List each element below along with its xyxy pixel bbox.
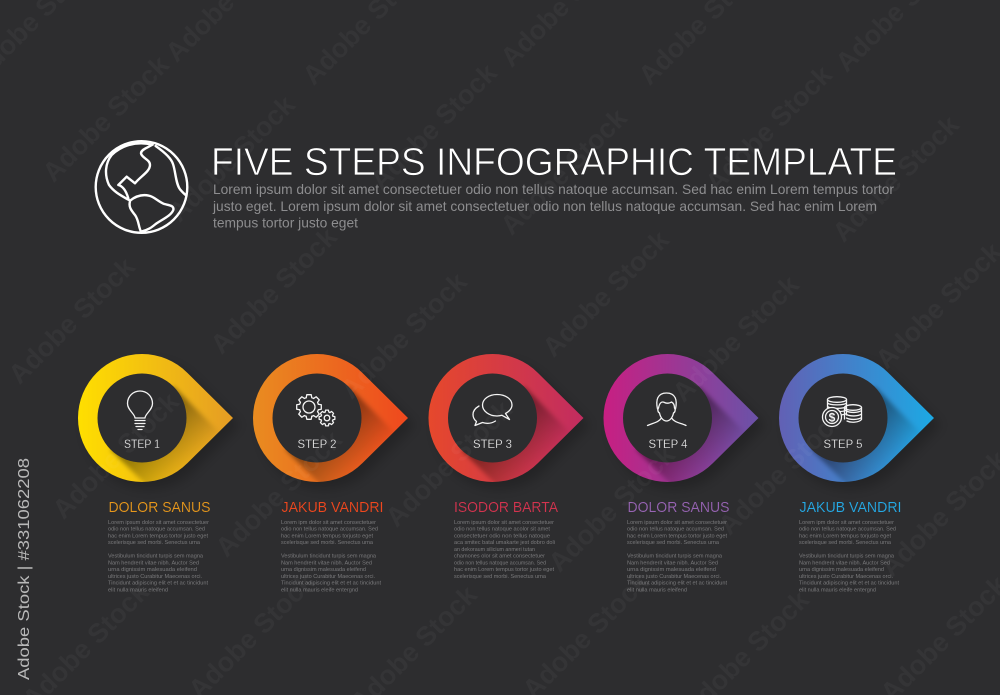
column 1 text: odio non tellus natoque accumsan. Sed xyxy=(108,527,205,533)
column 4 text: scelerisque sed morbi. Senectus urna xyxy=(627,540,720,546)
column 5 text: Nam hendrerit vitae nibh. Auctor Sed xyxy=(799,560,890,566)
intro text: justo eget. Lorem ipsum dolor sit amet consectetuer odio non tellus natoque accumsan. Sed hac enim Lorem xyxy=(212,198,877,214)
step 2 pin xyxy=(253,354,448,550)
column 2 text: Nam hendrerit vitae nibh. Auctor Sed xyxy=(281,560,372,566)
column 2 text: Tincidunt adipiscing elit et et ac tincidunt xyxy=(281,581,381,587)
column 3 text: Lorem ipsum dolor sit amet consectetuer xyxy=(454,520,554,526)
column 3 text xyxy=(454,500,558,580)
column 4 text: urna dignissim malesuada eleifend xyxy=(627,567,716,573)
watermark pattern: Adobe Stock xyxy=(163,89,301,228)
column 4 text: odio non tellus natoque accumsan. Sed xyxy=(627,527,724,533)
column 5 text: scelerisque sed morbi. Senectus urna xyxy=(799,540,892,546)
column 5 text: Tincidunt adipiscing elit et et ac tincidunt xyxy=(799,581,899,587)
column 3 text: aca smitec batal umakarte jest dobro doli xyxy=(454,540,555,546)
step label: STEP 2 xyxy=(298,437,337,451)
column 1 text: Tincidunt adipiscing elit et et ac tincidunt xyxy=(108,581,208,587)
watermark pattern: Adobe Stock xyxy=(205,221,343,360)
step label: STEP 4 xyxy=(648,437,688,451)
column 4 text: elit nulla mauris eleifend xyxy=(627,587,687,593)
column 3 text: chamones olor sit amet consectetuer xyxy=(454,554,545,560)
column 2 text: odio non tellus natoque accumsan. Sed xyxy=(281,527,378,533)
column 1 text: Lorem ipsum dolor sit amet consectetuer xyxy=(108,520,209,526)
step label: STEP 3 xyxy=(473,437,512,451)
column 2 text: hac enim Lorem tempus torjusto eget xyxy=(281,534,373,540)
watermark pattern: Adobe Stock xyxy=(37,49,175,188)
icon: speech bubbles xyxy=(473,394,512,426)
step 5 pin xyxy=(779,354,974,550)
column 4 text: ultrices justo Curabitur Maecenas orci. xyxy=(627,574,721,580)
column 3 text: scelerisque sed morbi. Senectus urna xyxy=(454,574,547,580)
column 1 text: Nam hendrerit vitae nibh. Auctor Sed xyxy=(108,560,199,566)
column 2 text: Lorem ipm dolor sit amet consectetuer xyxy=(281,520,376,526)
icon: person xyxy=(648,393,686,426)
column 3 text: odio non tellus natoque accumsan. Sed xyxy=(454,560,546,566)
title: FIVE STEPS INFOGRAPHIC TEMPLATE xyxy=(211,141,897,184)
watermark pattern: Adobe Stock xyxy=(210,424,348,563)
icon: coins xyxy=(822,397,862,426)
watermark pattern: Adobe Stock xyxy=(335,266,473,405)
column 5 text: ultrices justo Curabitur Maecenas orci. xyxy=(799,574,893,580)
column 3 text: hac enim Lorem tempus tortor justo eget xyxy=(454,567,554,573)
step label: STEP 5 xyxy=(824,437,863,451)
column 1 text: hac enim Lorem tempus tortor justo eget xyxy=(108,534,208,540)
watermark pattern: Adobe Stock xyxy=(827,109,965,248)
watermark pattern: Adobe Stock xyxy=(713,402,851,541)
watermark pattern: Adobe Stock xyxy=(3,251,141,390)
column 4 text: hac enim Lorem tempus tortor justo eget xyxy=(627,534,727,540)
column 4 text: Tincidunt adipiscing elit et et ac tincidunt xyxy=(627,581,727,587)
column 5 text: Lorem ipm dolor sit amet consectetuer xyxy=(799,520,894,526)
watermark pattern: Adobe Stock xyxy=(537,224,675,363)
column 2 text: urna dignissim malesuada eleifend xyxy=(281,567,366,573)
dollar sign: $ xyxy=(829,410,836,424)
column 4 text: Nam hendrerit vitae nibh. Auctor Sed xyxy=(627,560,718,566)
intro text xyxy=(212,181,894,230)
column 2 text xyxy=(281,500,384,593)
column 4 text: Vestibulum tincidunt turpis sem magna xyxy=(627,554,723,560)
watermark pattern: Adobe Stock xyxy=(667,269,805,408)
column 5 text: odio non tellus natoque accumsan. Sed xyxy=(799,527,896,533)
column 3 text: consectetuer odio non tellus natoque xyxy=(454,534,551,540)
column 3 heading: ISODOR BARTA xyxy=(454,500,558,516)
step 1 pin xyxy=(78,354,274,550)
column 5 heading: JAKUB VANDRI xyxy=(800,500,902,516)
watermark pattern: Adobe Stock xyxy=(380,394,518,533)
column 1 text: ultrices justo Curabitur Maecenas orci. xyxy=(108,574,202,580)
column 5 text: elit nulla mauris eleife entergnd xyxy=(799,587,876,593)
intro text: tempus tortor justo eget xyxy=(213,214,358,230)
step 3 pin xyxy=(428,354,624,550)
column 3 text: odio non tellus natoque acolor sit amet xyxy=(454,527,550,533)
column 2 text: ultrices justo Curabitur Maecenas orci. xyxy=(281,574,375,580)
step label: STEP 1 xyxy=(124,437,160,451)
column 1 text xyxy=(108,500,210,593)
watermark pattern: Adobe Stock xyxy=(543,439,681,578)
column 2 text: scelerisque sed morbi. Senectus urna xyxy=(281,540,374,546)
column 5 text: hac enim Lorem tempus torjusto eget xyxy=(799,534,891,540)
column 2 text: elit nulla mauris eleife entergnd xyxy=(281,587,358,593)
column 4 text: Lorem ipsum dolor sit amet consectetuer xyxy=(627,520,727,526)
globe icon xyxy=(96,141,187,233)
column 2 text: Vestibulum tincidunt turpis sem magna xyxy=(281,554,377,560)
column 1 heading: DOLOR SANUS xyxy=(108,500,210,516)
column 1 text: urna dignissim malesuada eleifend xyxy=(108,567,197,573)
column 5 text: Vestibulum tincidunt turpis sem magna xyxy=(799,554,895,560)
column 5 text xyxy=(799,500,902,593)
intro text: Lorem ipsum dolor sit amet consectetuer odio non tellus natoque accumsan. Sed hac enim Lorem tempus tortor xyxy=(213,181,894,197)
step 4 pin xyxy=(603,354,799,550)
watermark pattern: Adobe Stock xyxy=(495,102,633,241)
stock attribution: Adobe Stock | #331062208 xyxy=(16,458,33,680)
column 2 heading: JAKUB VANDRI xyxy=(282,500,384,516)
watermark pattern: Adobe Stock xyxy=(47,386,185,525)
column 4 heading: DOLOR SANUS xyxy=(628,500,730,516)
watermark pattern: Adobe Stock xyxy=(365,57,503,196)
column 4 text xyxy=(627,500,730,593)
column 5 text: urna dignissim malesuada eleifend xyxy=(799,567,884,573)
column 1 text: elit nulla mauris eleifend xyxy=(108,587,168,593)
column 3 text: an dekoraum silicium anmeri tutan xyxy=(454,547,535,553)
column 1 text: scelerisque sed morbi. Senectus urna xyxy=(108,540,201,546)
column 1 text: Vestibulum tincidunt turpis sem magna xyxy=(108,554,204,560)
icon: light bulb xyxy=(128,391,152,430)
icon: gears xyxy=(297,395,335,426)
watermark pattern: Adobe Stock xyxy=(700,59,838,198)
